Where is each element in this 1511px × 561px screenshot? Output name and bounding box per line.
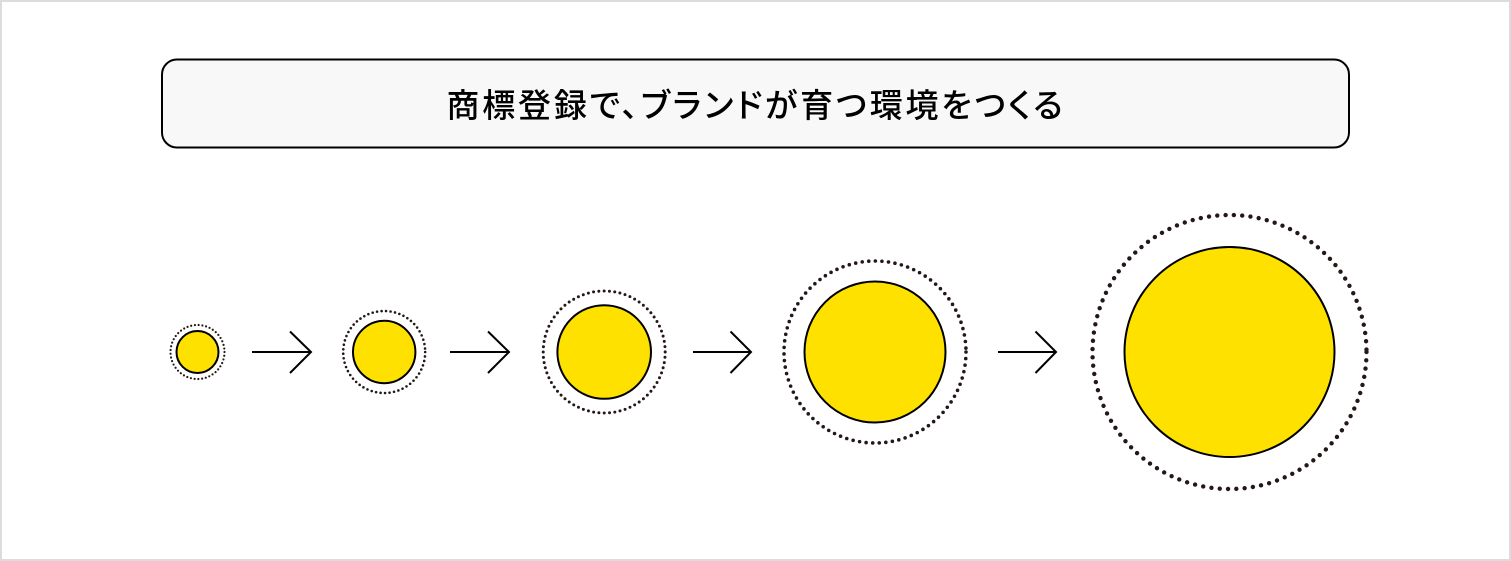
circle stage 2 bbox=[343, 311, 425, 393]
circle stage 5 bbox=[1092, 215, 1366, 489]
circle stage 3 bbox=[543, 291, 665, 413]
circle stage 1 bbox=[170, 325, 224, 379]
arrow 3 bbox=[693, 332, 751, 373]
title text: 商標登録で、ブランドが育つ環境をつくる bbox=[446, 87, 1066, 124]
arrow 1 bbox=[252, 332, 311, 373]
title banner bbox=[162, 60, 1349, 148]
circle stage 4 bbox=[784, 261, 966, 443]
arrow 2 bbox=[450, 332, 509, 373]
arrow 4 bbox=[998, 332, 1056, 373]
